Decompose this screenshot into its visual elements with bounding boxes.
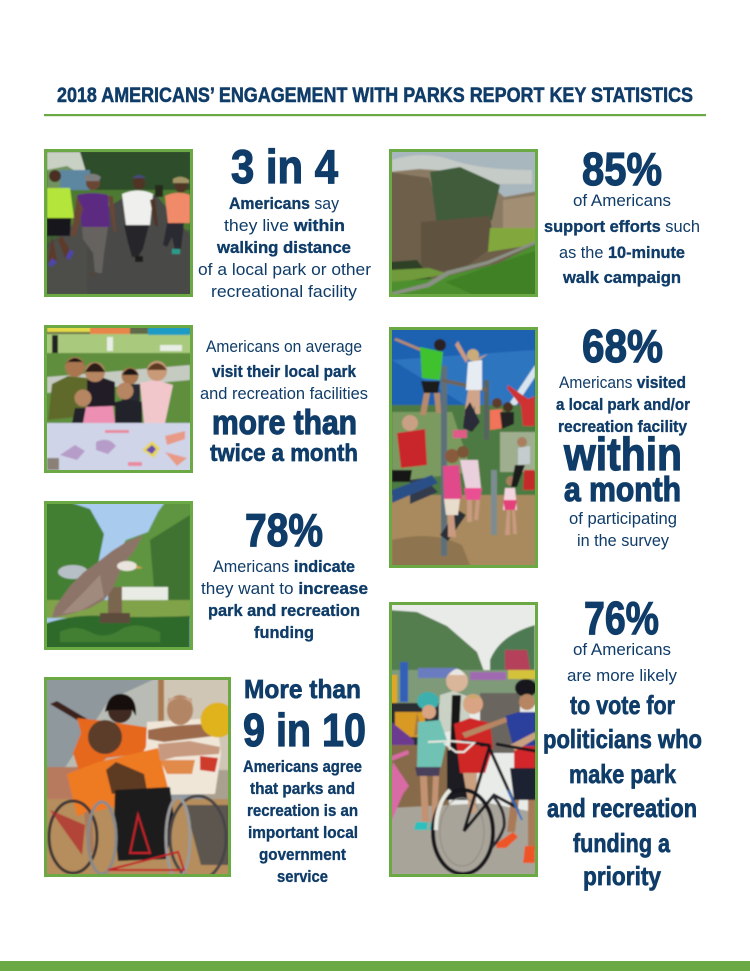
stat: more than 9 in 10: 9 in 10 bbox=[243, 704, 366, 756]
player 1 bbox=[50, 693, 148, 770]
text: funding description bbox=[201, 557, 368, 642]
player 3 bbox=[67, 720, 220, 854]
text: local government description: recreation is an bbox=[247, 801, 358, 820]
photo: women walking on a park path bbox=[44, 149, 193, 297]
bicycles bbox=[428, 741, 541, 874]
photo: children with a painted mural bbox=[44, 325, 193, 473]
text: funding description: they want to increase bbox=[201, 579, 368, 598]
text: local government description: Americans agree bbox=[243, 757, 362, 776]
wheelchair bbox=[49, 787, 226, 880]
text: more likely bbox=[567, 640, 677, 685]
photo: eagle sculpture in a park bbox=[44, 501, 193, 650]
stat: more than twice a month bbox=[210, 404, 358, 467]
text: more likely: of Americans bbox=[573, 640, 671, 659]
text: visited description: recreation facility bbox=[558, 417, 687, 436]
text: visit frequency bbox=[200, 337, 368, 403]
girl with teal helmet bbox=[386, 692, 447, 830]
text: visited description bbox=[556, 373, 690, 436]
photo: children on playground climber bbox=[389, 327, 538, 570]
stat: more than 9 in 10: More than bbox=[244, 674, 361, 704]
walker 4 bbox=[163, 177, 190, 254]
stat: 68%: 68% bbox=[582, 320, 663, 372]
mural bbox=[44, 423, 193, 473]
kids group bbox=[48, 357, 173, 423]
panel: 68% within a month bbox=[389, 320, 690, 570]
girl in red bbox=[454, 694, 493, 813]
grandmother bbox=[438, 669, 471, 800]
text: visit frequency: and recreation facilities bbox=[200, 384, 368, 403]
stat: more than twice a month: more than bbox=[212, 404, 357, 442]
text: walk campaign description: walk campaign bbox=[562, 268, 681, 287]
text: funding description: park and recreation bbox=[208, 601, 360, 620]
text: walk campaign description: support efforts such bbox=[544, 217, 700, 236]
panel: 76% vote for politicians bbox=[386, 592, 702, 891]
boy in USA shirt bbox=[462, 679, 538, 863]
panel: 9 in 10 local government service bbox=[44, 674, 366, 886]
text: local government description bbox=[243, 757, 362, 886]
text: walk campaign description bbox=[544, 191, 700, 287]
text: survey note: in the survey bbox=[577, 531, 669, 550]
text: walking distance description: walking distance bbox=[216, 238, 351, 257]
text: more likely: are more likely bbox=[567, 666, 677, 685]
text: local government description: that parks and bbox=[250, 779, 355, 798]
stat: more than 9 in 10 bbox=[243, 674, 366, 756]
stat: within a month: a month bbox=[564, 471, 681, 509]
text: visited description: Americans visited bbox=[559, 373, 686, 392]
player 2 with ball bbox=[142, 694, 228, 796]
text: visited description: a local park and/or bbox=[556, 395, 690, 414]
text: walking distance description: recreational facility bbox=[211, 282, 358, 301]
text: survey note bbox=[569, 509, 677, 550]
text: walking distance description: Americans say bbox=[229, 194, 339, 213]
text: funding description: funding bbox=[254, 623, 314, 642]
eagle bbox=[52, 535, 143, 618]
walker 1 bbox=[47, 170, 74, 267]
stat: 78%: 78% bbox=[245, 504, 323, 556]
photo: children with bikes and an older woman bbox=[386, 602, 541, 877]
climbing children bbox=[392, 338, 535, 537]
text: vote for politicians bbox=[543, 690, 702, 891]
text: local government description: important local bbox=[248, 823, 358, 842]
stat: within a month: within bbox=[563, 428, 682, 480]
text: walk campaign description: of Americans bbox=[573, 191, 671, 210]
walker 3 bbox=[122, 175, 158, 262]
text: walking distance description: of a local park or other bbox=[198, 260, 371, 279]
photo: wheelchair ball players bbox=[44, 677, 236, 880]
text: vote for politicians: politicians who bbox=[543, 724, 702, 754]
text: funding description: Americans indicate bbox=[213, 557, 355, 576]
text: walk campaign description: as the 10-minute bbox=[559, 243, 685, 262]
panel: visit twice a month bbox=[44, 325, 368, 473]
text: visit frequency: Americans on average bbox=[206, 337, 362, 356]
text: visit frequency: visit their local park bbox=[212, 362, 356, 381]
text: local government description: service bbox=[277, 867, 328, 886]
text: vote for politicians: and recreation bbox=[547, 793, 697, 823]
walker 2 bbox=[71, 174, 116, 277]
footer bar bbox=[0, 961, 750, 971]
stat: 76%: 76% bbox=[584, 592, 659, 644]
panel: 78% funding bbox=[44, 501, 368, 650]
panel: 85% 10-minute walk bbox=[389, 143, 700, 297]
text: local government description: government bbox=[259, 845, 346, 864]
stat: more than twice a month: twice a month bbox=[210, 440, 358, 467]
panel: 3 in 4 walking distance bbox=[44, 140, 371, 301]
stat: 85%: 85% bbox=[582, 143, 662, 195]
climber poles bbox=[392, 366, 497, 556]
text: walking distance description: they live within bbox=[224, 216, 345, 235]
text: vote for politicians: make park bbox=[569, 759, 676, 789]
text: vote for politicians: priority bbox=[583, 861, 661, 891]
text: survey note: of participating bbox=[569, 509, 677, 528]
photo: green park hillside with path bbox=[389, 149, 538, 297]
text: vote for politicians: funding a bbox=[573, 828, 670, 858]
stat: within a month bbox=[563, 428, 682, 509]
stat: 3 in 4: 3 in 4 bbox=[231, 140, 338, 193]
text: vote for politicians: to vote for bbox=[570, 690, 675, 720]
text: walking distance description bbox=[198, 194, 371, 301]
